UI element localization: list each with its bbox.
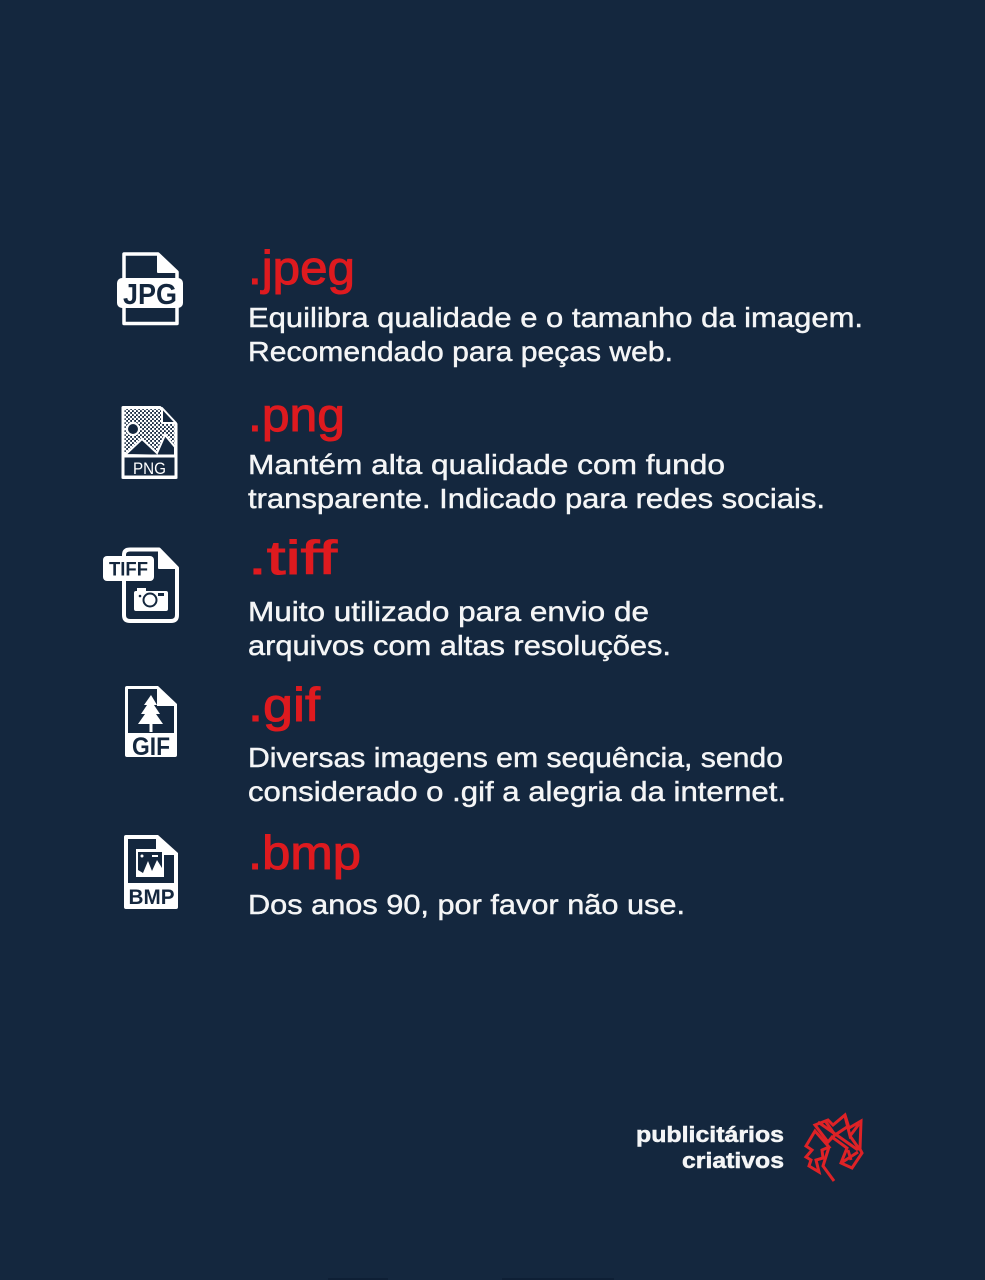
text: jpeg description: Equilibra qualidade e o tamanho da imagem. — [248, 302, 863, 333]
text: gif description: Diversas imagens em sequência, sendo — [248, 742, 783, 773]
text: png description: Mantém alta qualidade com fundo — [248, 449, 725, 480]
text: tiff description: arquivos com altas resoluções. — [248, 630, 671, 661]
brand name: publicitários — [636, 1122, 784, 1147]
icon: PNG file — [123, 408, 176, 478]
heading: .png: .png — [248, 388, 345, 441]
heading: .tiff: .tiff — [248, 531, 338, 584]
heading: .bmp: .bmp — [248, 826, 361, 879]
brand name: criativos — [682, 1148, 784, 1173]
text: bmp description: Dos anos 90, por favor não use. — [248, 889, 685, 920]
heading: .gif: .gif — [248, 678, 321, 731]
icon: BMP file — [124, 835, 178, 909]
icon: GIF file: GIF — [132, 733, 170, 761]
icon: BMP file: BMP — [128, 886, 174, 909]
text: jpeg description: Recomendado para peças web. — [248, 336, 673, 367]
icon: TIFF file — [103, 550, 177, 621]
text: gif description — [248, 742, 786, 807]
text: png description — [248, 449, 825, 514]
icon: JPG file — [117, 254, 183, 324]
icon: JPG file: JPG — [123, 279, 177, 311]
text: tiff description: Muito utilizado para envio de — [248, 596, 649, 627]
text: png description: transparente. Indicado para redes sociais. — [248, 483, 825, 514]
text: tiff description — [248, 596, 671, 661]
icon: PNG file: PNG — [133, 459, 166, 478]
brand name — [636, 1122, 784, 1173]
text: gif description: considerado o .gif a alegria da internet. — [248, 776, 786, 807]
icon: TIFF file: TIFF — [109, 560, 148, 580]
icon: GIF file — [125, 686, 177, 761]
icon: red brand logo — [806, 1115, 862, 1181]
heading: .jpeg: .jpeg — [248, 241, 355, 294]
text: jpeg description — [248, 302, 863, 367]
